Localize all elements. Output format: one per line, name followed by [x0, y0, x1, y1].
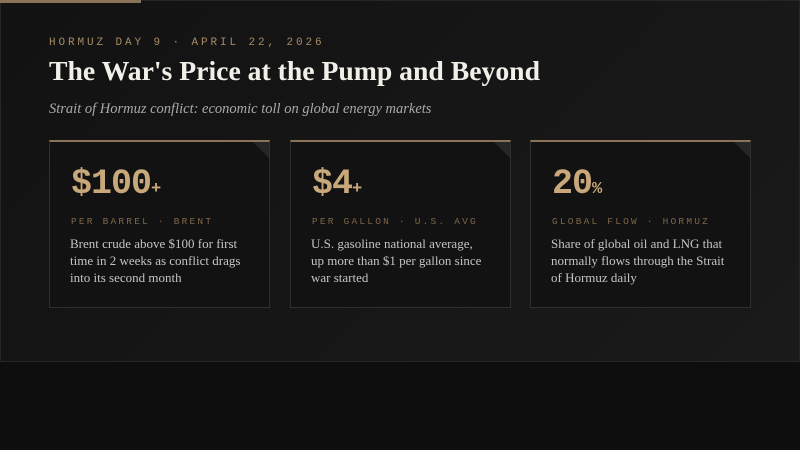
text: flow: Share of global oil and LNG that normally flows through the Strait of Hormuz daily	[551, 236, 724, 285]
label: per barrel: PER BARREL · BRENT	[71, 216, 213, 227]
text: gasoline	[311, 236, 481, 285]
stat: 20%: 20%	[552, 164, 602, 204]
text: gasoline: up more than $1 per gallon since war started	[311, 253, 481, 285]
kicker: HORMUZ DAY 9 · APRIL 22, 2026	[49, 37, 325, 49]
text: gasoline: U.S. gasoline national average,	[311, 236, 473, 251]
card: gasoline	[290, 140, 511, 308]
subtitle: Strait of Hormuz conflict: economic toll on global energy markets	[49, 101, 431, 117]
card: global flow	[530, 140, 751, 308]
label: global flow: GLOBAL FLOW · HORMUZ	[552, 216, 710, 227]
label: per gallon: PER GALLON · U.S. AVG	[312, 216, 478, 227]
title: The War's Price at the Pump and Beyond	[49, 55, 540, 86]
stat: $100+: $100+	[71, 164, 161, 204]
stat: $4+: $4+	[312, 164, 362, 204]
accent bar	[0, 0, 141, 3]
card: brent	[49, 140, 270, 308]
text: brent: Brent crude above $100 for first time in 2 weeks as conflict drags into its second month	[70, 236, 240, 285]
